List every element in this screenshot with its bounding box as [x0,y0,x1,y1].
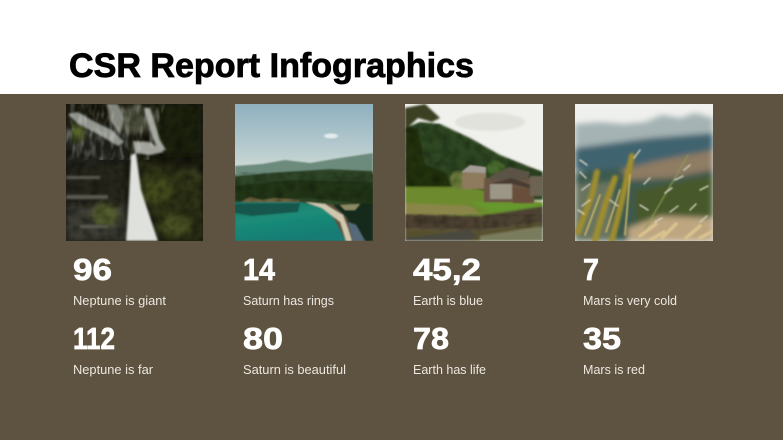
column 4 stats: 35 [583,321,621,356]
column 2 stats [243,252,346,377]
column 1 stats: Neptune is far [73,362,154,377]
column 4 stats [583,252,677,377]
column 3 stats: 45,2 [413,252,481,287]
column 1 stats [73,252,166,377]
column 3 stats: 78 [413,321,449,356]
column 1 stats: 112 [73,321,115,356]
column 2 stats: Saturn is beautiful [243,362,346,377]
column 1 stats: Neptune is giant [73,293,166,308]
photo: wild grass and mountains [575,104,713,241]
column 2 stats: Saturn has rings [243,293,334,308]
column 2 stats: 80 [243,321,283,356]
column 4 stats: Mars is red [583,362,645,377]
column 3 stats [413,252,486,377]
column 3 stats: Earth has life [413,362,486,377]
column 2 stats: 14 [243,252,276,287]
column 4 stats: Mars is very cold [583,293,677,308]
column 3 stats: Earth is blue [413,293,483,308]
photo: village [405,104,543,241]
title: CSR Report Infographics [69,47,474,85]
brown background panel [0,94,783,440]
column 4 stats: 7 [583,252,599,287]
column 1 stats: 96 [73,252,112,287]
photo: waterfall [66,104,203,241]
photo: coastal bay [235,104,373,241]
